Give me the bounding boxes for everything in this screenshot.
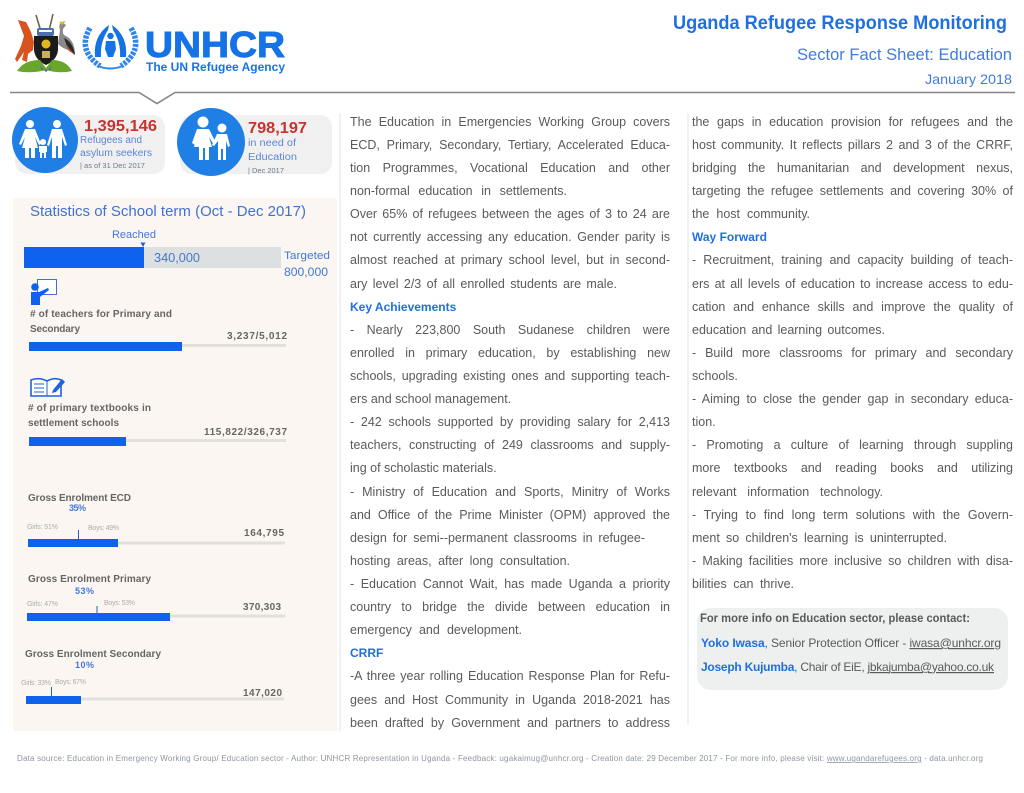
text: - Education Cannot Wait, has made Uganda a priority: [350, 577, 670, 591]
text: tion Programmes, Vocational Education and other: [350, 161, 670, 175]
metric: textbooks: [28, 403, 287, 446]
text: the host community.: [692, 207, 810, 221]
metric: teachers: [29, 309, 287, 351]
text: hosting areas, after long consultation.: [350, 554, 570, 568]
text: -A three year rolling Education Response Plan for Refu-: [350, 669, 670, 683]
metric: gross enrolment primary: 370,303: [243, 602, 281, 613]
text: schools, upgrading existing ones and supporting teach-: [350, 369, 670, 383]
text: ECD, Primary, Secondary, Tertiary, Accelerated Educa-: [350, 138, 670, 152]
text: non-formal education in settlements.: [350, 184, 567, 198]
panel: contact box: Joseph Kujumba, Chair of EiE, jbkajumba@yahoo.co.uk: [701, 660, 995, 674]
logo wordmark: UNHCR: The UN Refugee Agency: [146, 60, 285, 74]
text: design for semi--permanent classrooms in refugee-: [350, 531, 645, 545]
metric: gross enrolment ECD: 35%: [69, 503, 86, 513]
chart: reached vs targeted: Targeted: [284, 250, 330, 262]
text: - Promoting a culture of learning through suppling: [692, 438, 1013, 452]
text: schools.: [692, 369, 738, 383]
text: education and learning outcomes.: [692, 323, 885, 337]
logo wordmark: UNHCR: UNHCR: [145, 24, 285, 65]
icon: open book and pencil: [31, 379, 65, 396]
text: and Office of the Prime Minister (OPM) approved the: [350, 508, 670, 522]
text: - Recruitment, training and capacity building of teach-: [692, 253, 1013, 267]
chart: reached vs targeted: 340,000: [154, 250, 200, 265]
text: - Trying to find long term solutions with the Govern-: [692, 508, 1013, 522]
text: Over 65% of refugees between the ages of 3 to 24 are: [350, 207, 670, 221]
text: ing of scholastic materials.: [350, 461, 497, 475]
text column: overview, key achievements and CRRF: The Education in Emergencies Working Group covers: [350, 115, 670, 129]
metric: teachers: Secondary: [30, 324, 80, 335]
panel: refugee count: asylum seekers: [80, 148, 152, 159]
metric: gross enrolment ECD: [27, 493, 285, 547]
text: bridging the humanitarian and development nexus,: [692, 161, 1013, 175]
text: CRRF: [350, 646, 383, 660]
text: gees and Host Community in Uganda 2018-2021 has: [350, 693, 670, 707]
text: country to bridge the divide between education in: [350, 600, 670, 614]
metric: teachers: 3,237/5,012: [227, 331, 287, 342]
text: - Nearly 223,800 South Sudanese children were: [350, 323, 670, 337]
text: more textbooks and reading books and utilizing: [692, 461, 1013, 475]
text: Key Achievements: [350, 300, 456, 314]
panel: refugee count: [12, 107, 165, 174]
text: relevant information technology.: [692, 485, 883, 499]
metric: gross enrolment ECD: Girls: 51%: [27, 524, 58, 531]
text: not currently accessing any education. Gender parity is: [350, 230, 670, 244]
metric: gross enrolment secondary: Girls: 33%: [21, 680, 51, 687]
text: enrolled in primary education, by establishing new: [350, 346, 670, 360]
panel heading: Statistics of School term (Oct - Dec 2017): [30, 203, 306, 220]
panel: people in need: in need of: [248, 138, 296, 149]
chart: reached vs targeted: [24, 229, 330, 279]
metric: textbooks: settlement schools: [28, 418, 119, 429]
title block: [673, 13, 1012, 87]
metric: gross enrolment secondary: Boys: 67%: [55, 679, 86, 686]
metric: gross enrolment primary: Gross Enrolment Primary: [28, 574, 151, 585]
text: - 242 schools supported by providing salary for 2,413: [350, 415, 670, 429]
text: tion.: [692, 415, 716, 429]
title block: January 2018: [925, 71, 1012, 87]
metric: gross enrolment secondary: 10%: [75, 660, 94, 670]
text column: overview, key achievements and CRRF: [350, 115, 670, 730]
header rule with notch: [10, 92, 1015, 104]
panel: people in need: | Dec 2017: [248, 168, 284, 175]
panel: people in need: [177, 108, 332, 176]
chart: reached vs targeted: 800,000: [284, 265, 328, 279]
panel: statistics of school term: [13, 198, 337, 731]
text: teachers, constructing of 249 classrooms and supply-: [350, 438, 670, 452]
metric: gross enrolment primary: [27, 574, 285, 621]
icon: Uganda coat of arms: [15, 14, 75, 72]
icon: woman and child: [192, 116, 230, 160]
icon: family: [19, 120, 67, 158]
text: bilities can thrive.: [692, 577, 794, 591]
footer: data source: Data source: Education in Emergency Working Group/ Education sector - Author: UNHCR Representation in Uganda - Feedback: ugakaimug@unhcr.org - Creation date: 29 December 2017 - For more info, please visit: www.ugandarefugees.org - data.unhcr.org: [17, 754, 983, 763]
chart: reached vs targeted: Reached: [112, 229, 156, 241]
text: cation and enhance skills and improve the quality of: [692, 300, 1013, 314]
text: ers and school management.: [350, 392, 511, 406]
text: ers at all levels of education to increase access to edu-: [692, 277, 1013, 291]
metric: gross enrolment secondary: Gross Enrolment Secondary: [25, 649, 161, 660]
panel: people in need: Education: [248, 152, 297, 163]
panel: refugee count: Refugees and: [80, 135, 142, 146]
metric: gross enrolment primary: Boys: 53%: [104, 600, 135, 607]
text: Way Forward: [692, 230, 767, 244]
metric: textbooks: 115,822/326,737: [204, 427, 287, 438]
panel: people in need: 798,197: [248, 120, 307, 137]
icon: teacher at board: [31, 280, 56, 305]
metric: teachers: # of teachers for Primary and: [30, 309, 172, 320]
panel: contact box: [697, 608, 1008, 690]
panel: contact box: Yoko Iwasa, Senior Protection Officer - iwasa@unhcr.org: [701, 636, 1001, 650]
metric: gross enrolment secondary: 147,020: [243, 688, 282, 699]
text column: CRRF continued and way forward: the gaps in education provision for refugees and the: [692, 115, 1013, 129]
panel: contact box: For more info on Education sector, please contact:: [700, 611, 970, 625]
metric: gross enrolment secondary: [21, 649, 284, 704]
panel: refugee count: | as of 31 Dec 2017: [80, 163, 145, 170]
text: - Aiming to close the gender gap in secondary educa-: [692, 392, 1013, 406]
title block: Uganda Refugee Response Monitoring: [673, 13, 1007, 34]
text: ment so children's learning is uninterrupted.: [692, 531, 947, 545]
text: host community. It reflects pillars 2 and 3 of the CRRF,: [692, 138, 1013, 152]
metric: gross enrolment primary: 53%: [75, 586, 94, 596]
panel: refugee count: 1,395,146: [84, 118, 157, 135]
text column: CRRF continued and way forward: [692, 115, 1013, 591]
text: almost reached at primary school level, but in second-: [350, 253, 670, 267]
text: - Making facilities more inclusive so children with disa-: [692, 554, 1013, 568]
text: - Ministry of Education and Sports, Minitry of Works: [350, 485, 670, 499]
title block: Sector Fact Sheet: Education: [797, 45, 1012, 64]
metric: gross enrolment ECD: Gross Enrolment ECD: [28, 493, 131, 504]
column dividers: [340, 113, 688, 731]
metric: gross enrolment ECD: 164,795: [244, 528, 284, 539]
metric: gross enrolment ECD: Boys: 49%: [88, 525, 119, 532]
metric: textbooks: # of primary textbooks in: [28, 403, 151, 414]
text: ary level 2/3 of all enrolled students are male.: [350, 277, 617, 291]
icon: UNHCR emblem: [85, 25, 136, 68]
text: emergency and development.: [350, 623, 522, 637]
text: been drafted by Government and partners to address: [350, 716, 670, 730]
metric: gross enrolment primary: Girls: 47%: [27, 601, 58, 608]
text: targeting the refugee settlements and covering 30% of: [692, 184, 1013, 198]
text: - Build more classrooms for primary and secondary: [692, 346, 1013, 360]
